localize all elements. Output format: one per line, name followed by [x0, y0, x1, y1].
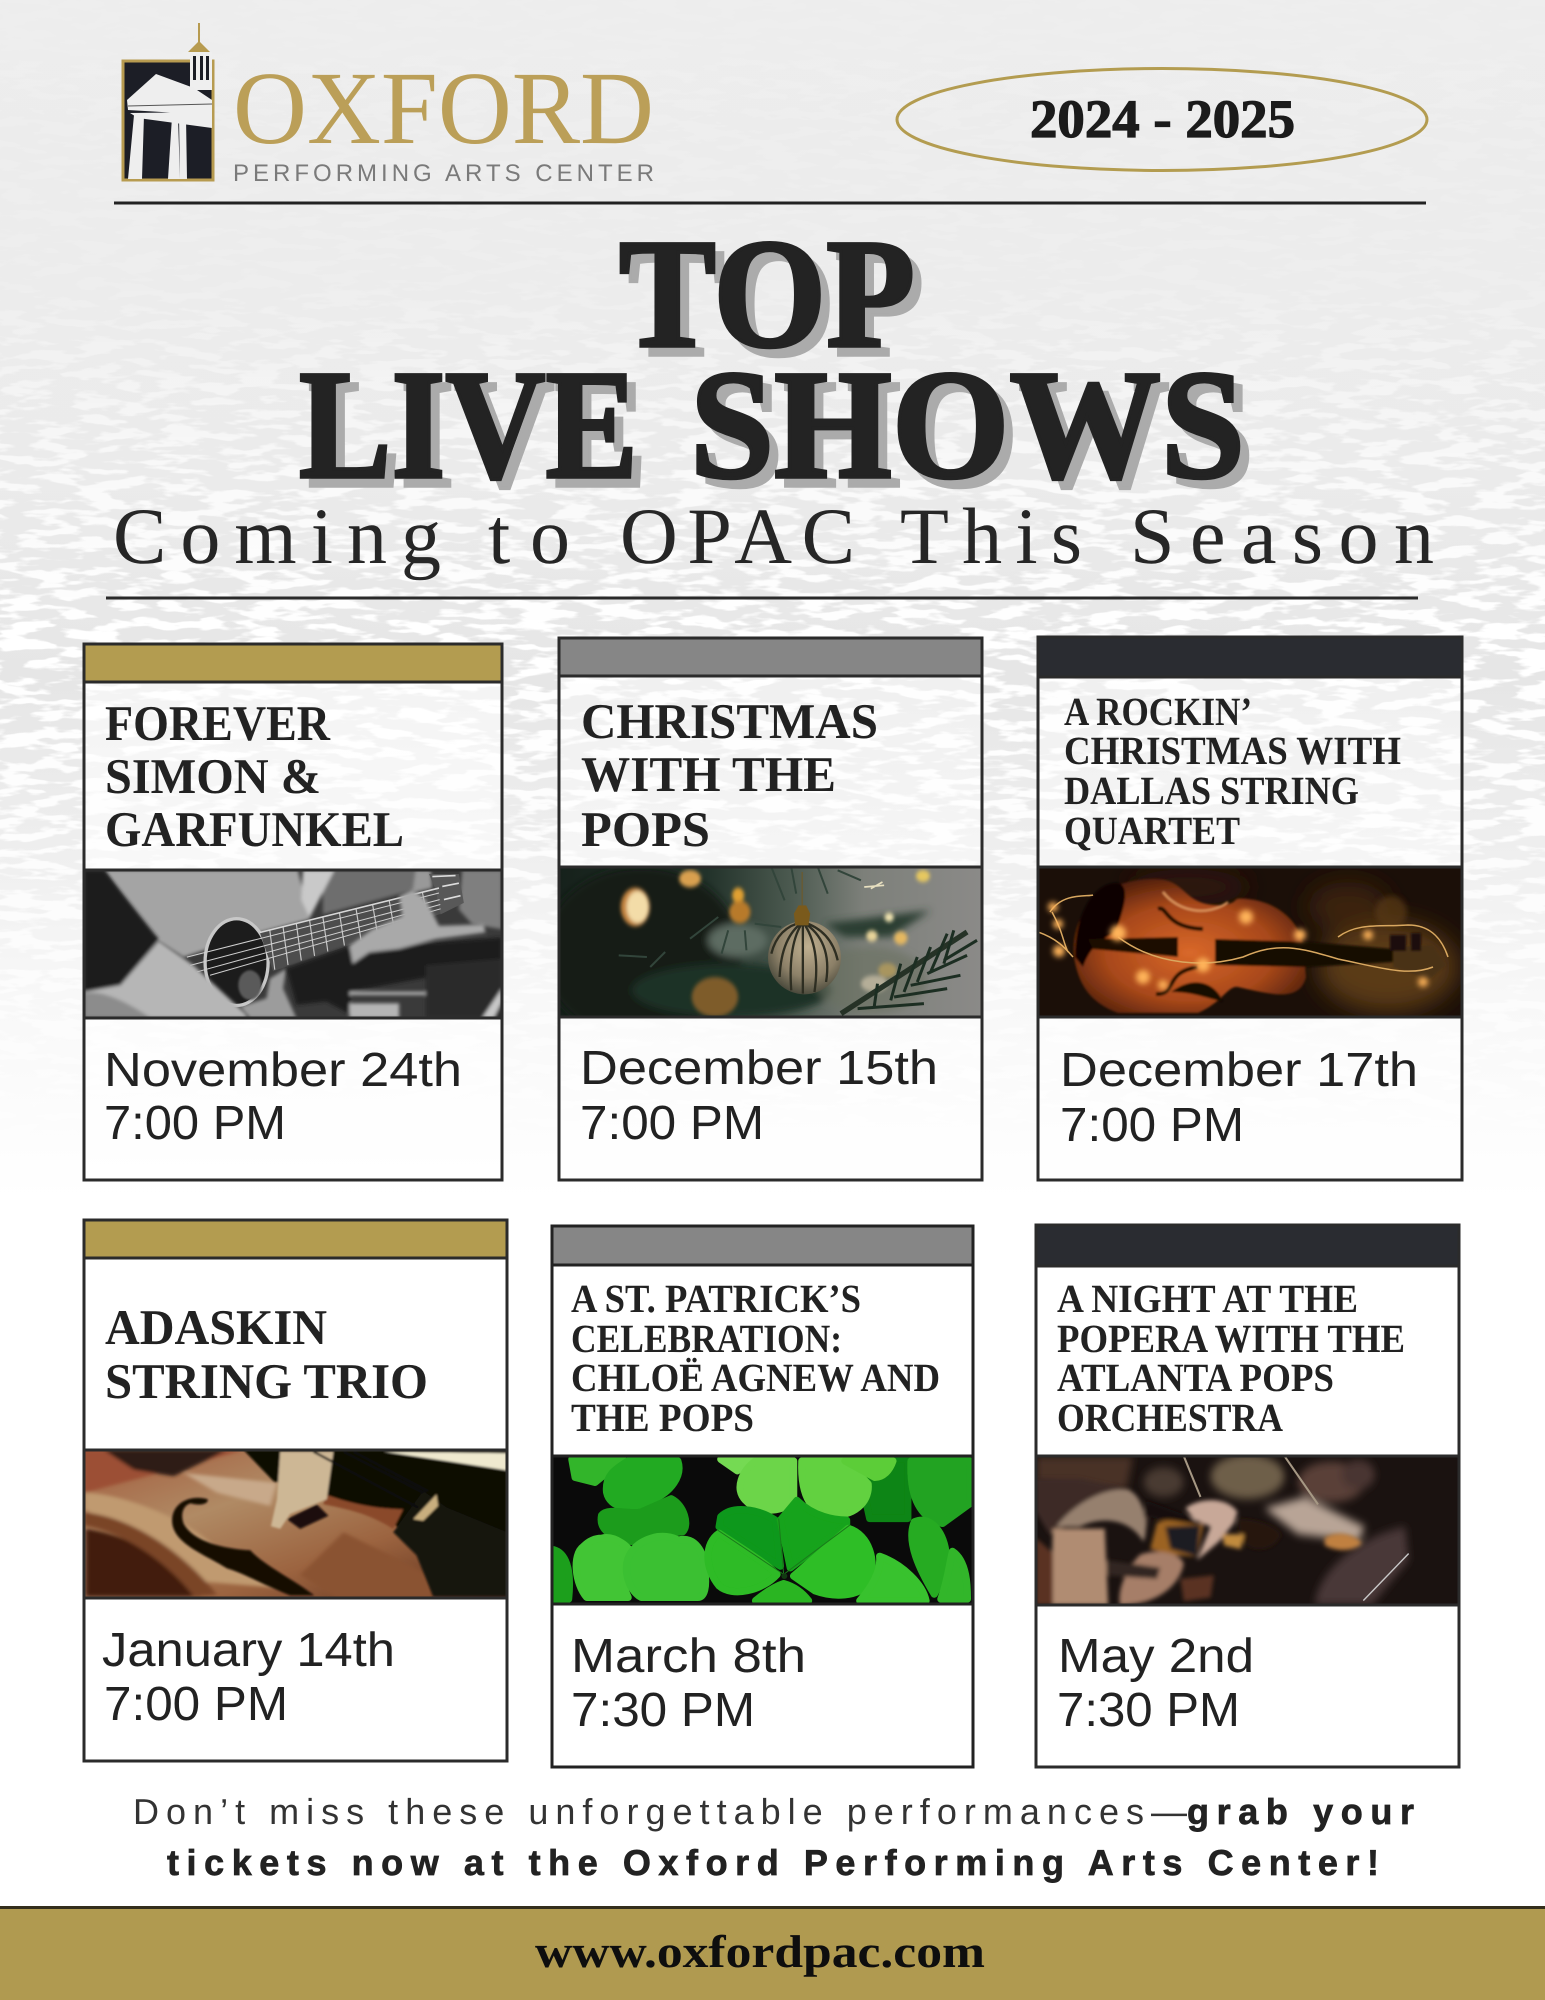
- show title: A NIGHT AT THE: [1057, 1276, 1358, 1321]
- subtitle: This: [900, 493, 1082, 581]
- show title: [1064, 689, 1401, 853]
- show date: 7:00 PM: [580, 1097, 764, 1150]
- show title: STRING TRIO: [105, 1353, 428, 1409]
- show date: 7:00 PM: [1060, 1099, 1244, 1152]
- ornament: [768, 872, 841, 994]
- title: [299, 207, 1254, 520]
- photo: violin with lights: [1040, 868, 1460, 1016]
- color bar: [84, 1220, 507, 1258]
- color bar: [84, 644, 502, 682]
- show title: DALLAS STRING: [1064, 768, 1359, 813]
- subtitle: Coming: [113, 493, 441, 581]
- show title: [581, 693, 878, 857]
- show title: QUARTET: [1064, 808, 1240, 853]
- show title: [1057, 1276, 1405, 1440]
- season badge: 2024 - 2025: [1030, 89, 1295, 149]
- show title: A ST. PATRICK’S: [571, 1276, 861, 1321]
- show date: [104, 1044, 462, 1150]
- photo: guitar: [86, 872, 500, 1016]
- show date: 7:00 PM: [104, 1678, 288, 1731]
- show title: POPS: [581, 801, 710, 857]
- show date: March 8th: [571, 1630, 806, 1683]
- logo: Oxford Performing Arts Center: [123, 23, 654, 187]
- card frames: [552, 1226, 973, 1767]
- photo: Christmas ornament: [560, 868, 980, 1016]
- title: SHOWS: [699, 347, 1254, 520]
- color bar: [1038, 637, 1462, 677]
- panel: Adaskin String Trio: [84, 1220, 507, 1761]
- show title: [571, 1276, 940, 1440]
- call to action text: tickets now at the Oxford Performing Arts Center!: [167, 1842, 1379, 1883]
- panel: A Night at the Popera: [1036, 1225, 1459, 1767]
- show title: [105, 695, 404, 857]
- show date: [571, 1630, 806, 1737]
- show title: CHLOË AGNEW AND: [571, 1355, 940, 1400]
- show date: November 24th: [104, 1044, 462, 1097]
- color bar: [1036, 1225, 1459, 1266]
- show date: [1060, 1044, 1418, 1152]
- website url: www.oxfordpac.com: [535, 1926, 985, 1977]
- photo: violin close-up: [86, 1452, 506, 1596]
- show title: POPERA WITH THE: [1057, 1316, 1405, 1361]
- textured background: [0, 0, 1545, 984]
- call to action text: Don’t miss these unforgettable performances—: [133, 1791, 1187, 1832]
- show title: GARFUNKEL: [105, 801, 404, 857]
- panel: A St. Patrick's Celebration: [552, 1226, 973, 1767]
- show title: CELEBRATION:: [571, 1316, 842, 1361]
- card frames: [559, 638, 982, 1180]
- subtitle: OPAC: [620, 493, 855, 581]
- photo: orchestra violinists: [1038, 1458, 1458, 1604]
- panel: Forever Simon & Garfunkel: [84, 644, 502, 1180]
- show title: WITH THE: [581, 746, 836, 802]
- show date: 7:00 PM: [104, 1097, 286, 1150]
- show title: [105, 1299, 428, 1409]
- color bar: [559, 638, 982, 676]
- call to action text: grab your: [1187, 1791, 1414, 1832]
- show date: January 14th: [102, 1624, 395, 1677]
- subtitle: to: [488, 493, 570, 581]
- card frames: [84, 1220, 507, 1761]
- show date: [1057, 1630, 1254, 1737]
- show date: May 2nd: [1058, 1630, 1254, 1683]
- title: TOP: [628, 216, 924, 389]
- card frames: [1036, 1225, 1459, 1767]
- show date: [580, 1042, 938, 1150]
- title: TOP: [619, 207, 915, 380]
- show title: FOREVER: [105, 695, 331, 751]
- title: SHOWS: [690, 338, 1245, 511]
- show title: CHRISTMAS WITH: [1064, 728, 1401, 773]
- color bar: [552, 1226, 973, 1265]
- show title: SIMON &: [105, 748, 321, 804]
- panel: A Rockin' Christmas: [1038, 637, 1462, 1180]
- show title: CHRISTMAS: [581, 693, 878, 749]
- title: LIVE: [299, 338, 638, 511]
- icon: building with tower: [123, 23, 213, 180]
- season badge: [897, 68, 1427, 170]
- show title: ORCHESTRA: [1057, 1395, 1283, 1440]
- photo: shamrocks: [554, 1458, 972, 1602]
- show title: A ROCKIN’: [1064, 689, 1252, 734]
- show title: ATLANTA POPS: [1057, 1355, 1334, 1400]
- call to action text: [133, 1791, 1414, 1883]
- show date: 7:30 PM: [1057, 1684, 1240, 1737]
- subtitle: [113, 493, 1434, 581]
- show date: 7:30 PM: [571, 1684, 755, 1737]
- card frames: [84, 644, 502, 1180]
- title: LIVE: [308, 347, 647, 520]
- subtitle: Season: [1130, 493, 1434, 581]
- tagline: PERFORMING ARTS CENTER: [233, 160, 654, 187]
- card frames: [1038, 637, 1462, 1180]
- show date: December 17th: [1060, 1044, 1418, 1097]
- wordmark OXFORD: OXFORD: [233, 51, 654, 166]
- footer band: [0, 1906, 1545, 2000]
- show date: [102, 1624, 395, 1731]
- show title: THE POPS: [571, 1395, 754, 1440]
- panel: Christmas with the Pops: [542, 638, 982, 1180]
- show date: December 15th: [580, 1042, 938, 1095]
- show title: ADASKIN: [105, 1299, 327, 1355]
